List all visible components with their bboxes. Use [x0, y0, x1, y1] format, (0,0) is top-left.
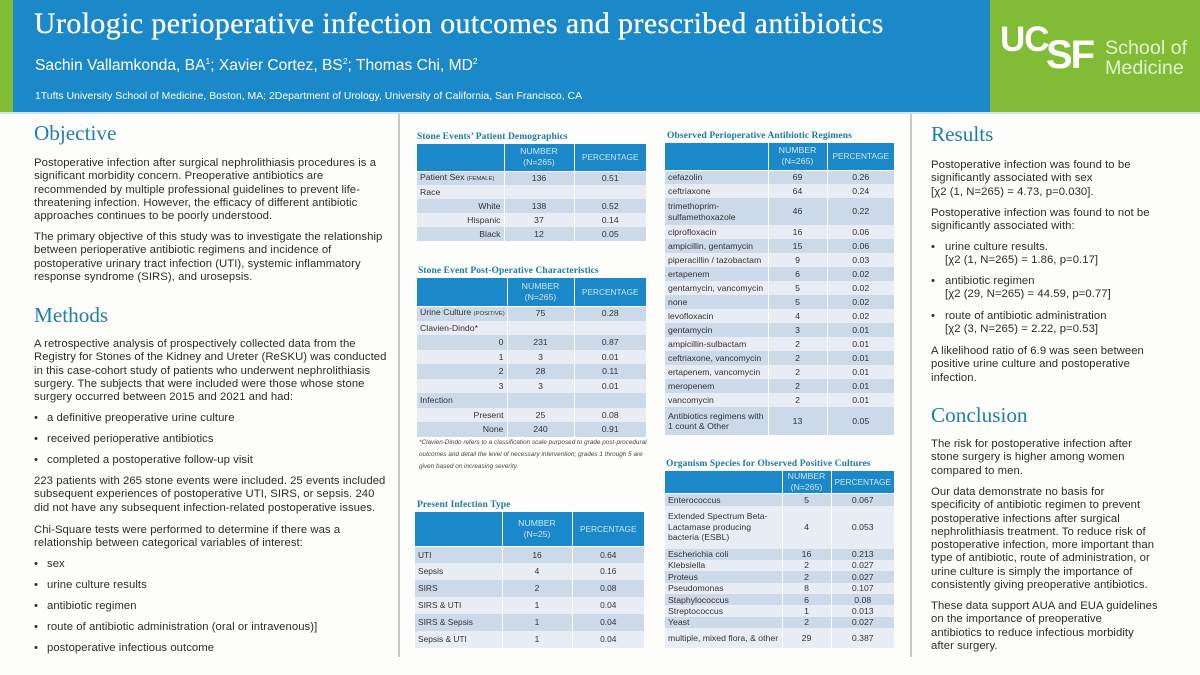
table: organism species: PERCENTAGE [834, 477, 891, 487]
list: non-associated variables: [χ2 (1, N=265) = 1.86, p=0.17] [945, 254, 1098, 266]
table: antibiotic regimens: 15 [793, 241, 802, 251]
list: inclusion criteria [34, 412, 253, 466]
text: sex association: [χ2 (1, N=265) = 4.73, p=0.030]. [931, 186, 1094, 198]
table: post-operative characteristics: 3 [538, 380, 543, 390]
table: present infection type: 2 [535, 583, 539, 593]
table: post-operative characteristics: 0.01 [602, 380, 619, 390]
table: present infection type: UTI [418, 550, 432, 560]
table: antibiotic regimens: piperacillin / tazobactam [668, 255, 761, 265]
table: organism species: 0.08 [854, 594, 871, 604]
table: post-operative characteristics: 0.11 [602, 366, 618, 376]
table: organism species: Klebsiella [668, 560, 705, 570]
table: antibiotic regimens: meropenem [668, 381, 714, 391]
table: organism species: 2 [804, 560, 809, 570]
column divider right [910, 114, 912, 657]
table: organism species: 2 [804, 572, 809, 582]
table: antibiotic regimens: 0.02 [852, 297, 869, 307]
list: non-associated variables: [χ2 (3, N=265) = 2.22, p=0.53] [945, 323, 1098, 335]
table: antibiotic regimens: 0.01 [852, 325, 869, 335]
table: antibiotic regimens: 6 [795, 269, 800, 279]
table: antibiotic regimens: 64 [793, 186, 802, 196]
panel: results and conclusion [931, 122, 1158, 652]
text: patient counts: subsequent experiences of postoperative UTI, SIRS, or sepsis. 240 [34, 488, 374, 500]
table: organism species: Streptococcus [668, 606, 723, 616]
table: organism species: 0.213 [852, 549, 874, 559]
text: methods paragraph: surgery. The subjects that were included were those whose stone [34, 378, 365, 390]
authors: Sachin Vallamkonda, BA1; Xavier Cortez, BS2; Thomas Chi, MD2 [35, 56, 478, 74]
table: present infection type: 0.04 [600, 617, 616, 627]
text: no association intro: Postoperative infection was found to not be [931, 207, 1150, 219]
table: post-operative characteristics: 3 [499, 380, 504, 390]
left green stripe [0, 0, 13, 112]
footnote: Clavien-Dindo [419, 439, 647, 470]
table: present infection type: 1 [535, 634, 539, 644]
table: organism species: multiple, mixed flora, & other [668, 633, 778, 643]
footnote: Clavien-Dindo: outcomes and detail the level of necessary intervention; grades 1 through 5 are [419, 451, 643, 458]
table: organism species: bacteria (ESBL) [668, 532, 729, 542]
table: antibiotic regimens: 0.03 [852, 255, 869, 265]
text: chi-square intro: relationship between categorical variables of interest: [34, 537, 303, 549]
table: antibiotic regimens: Antibiotics regimens with [668, 410, 764, 420]
list: non-associated variables: antibiotic regimen [945, 275, 1035, 287]
table: patient demographics: 37 [534, 215, 544, 225]
text: conclusion 2: urine culture is simply the importance of [931, 566, 1132, 578]
text: likelihood ratio: infection. [931, 372, 977, 384]
table: organism species: 1 [804, 606, 809, 616]
text: methods paragraph: surgery occurred between 2015 and 2021 and had: [34, 391, 293, 403]
text: objective paragraph 1: approaches continues to be poorly understood. [34, 210, 272, 222]
affiliations: 1Tufts University School of Medicine, Boston, MA; 2Department of Urology, University of California, San Francisco, CA [35, 91, 582, 102]
table: antibiotic regimens: 0.05 [852, 416, 869, 426]
table: post-operative characteristics [417, 278, 646, 437]
table: organism species: 0.387 [852, 633, 874, 643]
table: post-operative characteristics: None [483, 424, 504, 434]
table: organism species: Proteus [668, 572, 698, 582]
table: present infection type: 0.04 [600, 600, 616, 610]
table: present infection type: NUMBER [518, 518, 556, 528]
table: organism species: (N=265) [791, 482, 822, 492]
text: conclusion 2: nephrolithiasis treatment. To reduce risk of [931, 526, 1146, 538]
table: antibiotic regimens: 5 [795, 283, 800, 293]
table: present infection type: 1 [535, 600, 539, 610]
table: antibiotic regimens: 0.01 [852, 367, 869, 377]
table: patient demographics: 136 [532, 173, 546, 183]
table: antibiotic regimens: ceftriaxone, vancomycin [668, 353, 761, 363]
table: present infection type: 1 [535, 617, 539, 627]
text: no association intro [931, 207, 1150, 232]
text: methods paragraph: in this case-cohort study of patients who underwent nephrolithiasis [34, 365, 370, 377]
list: inclusion criteria: a definitive preoperative urine culture [47, 412, 235, 424]
text: conclusion 2: consistently giving preoperative antibiotics. [931, 579, 1148, 591]
green logo panel [990, 0, 1200, 112]
table: patient demographics: 0.52 [602, 201, 619, 211]
table: post-operative characteristics: Clavien-Dindo* [420, 322, 478, 332]
table: post-operative characteristics: (N=265) [525, 292, 556, 302]
table: organism species: 5 [804, 494, 809, 504]
table: antibiotic regimens: 0.22 [852, 206, 869, 216]
logo: School of Medicine [1105, 37, 1188, 79]
table: antibiotic regimens: gentamycin, vancomycin [668, 283, 763, 293]
table: antibiotic regimens: 0.24 [852, 186, 869, 196]
table: antibiotic regimens: sulfamethoxazole [668, 212, 736, 222]
blue title background [13, 0, 990, 112]
logo: UCSF wordmark: UC [1000, 20, 1049, 59]
text: conclusion 3: antibiotics to reduce infectious morbidity [931, 627, 1134, 639]
text: patient counts [34, 475, 385, 514]
table: post-operative characteristics: 3 [538, 352, 543, 362]
text: objective paragraph 2: between perioperative antibiotic regimens and incidence of [34, 244, 331, 256]
table: antibiotic regimens: 5 [795, 297, 800, 307]
table: antibiotic regimens: gentamycin [668, 325, 712, 335]
table: antibiotic regimens: 16 [793, 227, 802, 237]
table: patient demographics: PERCENTAGE [582, 152, 639, 162]
footnote: Clavien-Dindo: given based on increasing severity. [419, 463, 518, 470]
table: organism species: Pseudomonas [668, 583, 724, 593]
table: antibiotic regimens: NUMBER [779, 145, 816, 155]
table: present infection type: 0.08 [600, 583, 616, 593]
table: antibiotic regimens: ceftriaxone [668, 186, 710, 196]
table: antibiotic regimens: 2 [795, 381, 800, 391]
table: antibiotic regimens: 2 [795, 367, 800, 377]
heading: present infection table: Present Infection Type [417, 500, 510, 510]
text: methods paragraph: Registry for Stones of the Kidney and Ureter (ReSKU) was conducted [34, 351, 386, 363]
text: sex association: Postoperative infection was found to be [931, 159, 1131, 171]
table: present infection type: (N=25) [524, 529, 550, 539]
text: objective paragraph 2: postoperative urinary tract infection (UTI), systemic inflammatory [34, 258, 361, 270]
heading: organism species table: Organism Species for Observed Positive Cultures [666, 458, 871, 468]
panel: objective and methods: • [34, 600, 38, 612]
table: post-operative characteristics: 75 [536, 308, 545, 318]
table: post-operative characteristics: 231 [533, 337, 548, 347]
heading: demographics table: Stone Events’ Patient Demographics [417, 132, 568, 142]
panel: results and conclusion: • [931, 275, 935, 287]
text: objective paragraph 2: response syndrome (SIRS), and urosepsis. [34, 271, 252, 283]
table: patient demographics: 0.05 [602, 229, 619, 239]
table: antibiotic regimens: PERCENTAGE [832, 151, 889, 161]
text: patient counts: 223 patients with 265 stone events were included. 25 events included [34, 475, 385, 487]
text: conclusion 2: specificity of antibiotic regimen to prevent [931, 499, 1140, 511]
list: inclusion criteria: received perioperative antibiotics [47, 433, 214, 445]
table: antibiotic regimens: 2 [795, 339, 800, 349]
table: post-operative characteristics: 25 [536, 410, 545, 420]
text: objective paragraph 1: Postoperative infection after surgical nephrolithiasis procedures is a [34, 157, 376, 169]
table: organism species: 0.107 [852, 583, 874, 593]
title: Urologic perioperative infection outcomes and prescribed antibiotics [34, 7, 884, 40]
table: post-operative characteristics: PERCENTAGE [582, 286, 639, 296]
table: antibiotic regimens: 3 [795, 325, 800, 335]
table: organism species: Staphylococcus [668, 594, 729, 604]
table: antibiotic regimens: 1 count & Other [668, 421, 729, 431]
table: antibiotic regimens: 0.02 [852, 269, 869, 279]
table: present infection type: PERCENTAGE [580, 524, 637, 534]
logo: UCSF wordmark: SF [1046, 33, 1093, 77]
table: organism species: 6 [804, 594, 809, 604]
panel: results and conclusion: • [931, 310, 935, 322]
table: antibiotic regimens: 2 [795, 395, 800, 405]
table: antibiotic regimens: 0.01 [852, 339, 869, 349]
table: organism species: Yeast [668, 617, 689, 627]
table: antibiotic regimens [665, 143, 894, 435]
table: antibiotic regimens: ampicillin, gentamycin [668, 241, 753, 251]
table: present infection type [415, 512, 644, 648]
table: antibiotic regimens: 0.01 [852, 381, 869, 391]
list: variables [34, 558, 317, 654]
heading: results: Results [931, 122, 993, 146]
table: post-operative characteristics: Infection [420, 395, 453, 405]
list: non-associated variables: [χ2 (29, N=265) = 44.59, p=0.77] [945, 288, 1111, 300]
table: organism species: 0.027 [852, 560, 874, 570]
list: variables: sex [47, 558, 65, 570]
table: organism species: 0.027 [852, 572, 874, 582]
table: organism species: 0.013 [852, 606, 874, 616]
text: objective paragraph 1: threatening infection. However, the efficacy of different antibiotic [34, 197, 357, 209]
panel: objective and methods: • [34, 454, 38, 466]
table: organism species: 4 [804, 522, 809, 532]
text: likelihood ratio: A likelihood ratio of 6.9 was seen between [931, 345, 1144, 357]
table: post-operative characteristics: 1 [499, 352, 504, 362]
table: post-operative characteristics: 240 [533, 424, 548, 434]
table: organism species: 29 [802, 633, 811, 643]
table: antibiotic regimens: 4 [795, 311, 800, 321]
logo: UCSF wordmark [1000, 20, 1094, 77]
table: post-operative characteristics: 28 [536, 366, 545, 376]
table: organism species: 8 [804, 583, 809, 593]
table: organism species: 0.067 [852, 494, 874, 504]
panel: objective and methods: • [34, 412, 38, 424]
table: antibiotic regimens: 0.02 [852, 311, 869, 321]
text: conclusion 1: compared to men. [931, 465, 1023, 477]
table: post-operative characteristics: 0.28 [602, 308, 619, 318]
table: post-operative characteristics: Present [474, 410, 504, 420]
logo: School of Medicine: School of [1105, 37, 1187, 59]
table: organism species: Enterococcus [668, 494, 721, 504]
text: methods paragraph: A retrospective analysis of prospectively collected data from the [34, 338, 356, 350]
table: antibiotic regimens: ampicillin-sulbactam [668, 339, 746, 349]
text: conclusion 3: after surgery. [931, 640, 998, 652]
table: post-operative characteristics: 2 [499, 366, 504, 376]
text: methods paragraph [34, 338, 386, 403]
panel: objective and methods: • [34, 642, 38, 654]
table: patient demographics: NUMBER [520, 146, 558, 156]
table: antibiotic regimens: cefazolin [668, 172, 702, 182]
table: patient demographics: Black [479, 229, 500, 239]
text: conclusion 3: These data support AUA and EUA guidelines [931, 600, 1158, 612]
footnote: Clavien-Dindo: *Clavien-Dindo refers to a classification scale purposed to grade post-procedural [419, 439, 647, 446]
table: patient demographics: White [478, 201, 500, 211]
table: organism species: Lactamase producing [668, 522, 751, 532]
text: no association intro: significantly associated with: [931, 220, 1075, 232]
table: antibiotic regimens: 0.06 [852, 227, 869, 237]
text: conclusion 1: stone surgery is higher among women [931, 451, 1125, 463]
text: conclusion 1 [931, 438, 1132, 477]
table: antibiotic regimens: 2 [795, 353, 800, 363]
table: antibiotic regimens: ertapenem [668, 269, 710, 279]
panel: objective and methods: • [34, 558, 38, 570]
table: present infection type: 4 [535, 566, 539, 576]
table: antibiotic regimens: 0.01 [852, 353, 869, 363]
text: chi-square intro [34, 524, 340, 549]
text: sex association: significantly associated with sex [931, 172, 1092, 184]
table: post-operative characteristics: 0 [499, 337, 504, 347]
table: post-operative characteristics: 0.08 [602, 410, 619, 420]
table: present infection type: 16 [532, 550, 542, 560]
heading: antibiotic regimens table: Observed Perioperative Antibiotic Regimens [667, 130, 852, 140]
table: organism species: Extended Spectrum Beta- [668, 511, 767, 521]
table: patient demographics: (N=265) [523, 157, 555, 167]
list: variables: route of antibiotic administration (oral or intravenous)] [47, 621, 317, 633]
text: conclusion 2: type of antibiotic, route of administration, or [931, 552, 1150, 564]
table: antibiotic regimens: 0.01 [852, 395, 869, 405]
table: organism species: 2 [804, 617, 809, 627]
table: patient demographics [417, 144, 646, 241]
table: present infection type: 0.16 [600, 566, 616, 576]
header bottom edge [0, 112, 1200, 114]
table: post-operative characteristics: 0.91 [602, 424, 619, 434]
table: patient demographics: Patient Sex (FEMALE) [420, 172, 494, 182]
column divider left [398, 114, 400, 657]
text: objective paragraph 2: The primary objective of this study was to investigate the relationship [34, 231, 382, 243]
table: antibiotic regimens: ciprofloxacin [668, 227, 716, 237]
text: patient counts: did not have any subsequent infection-related postoperative issues. [34, 502, 375, 514]
text: likelihood ratio [931, 345, 1144, 384]
list: variables: postoperative infectious outcome [47, 642, 214, 654]
logo: School of Medicine: Medicine [1105, 57, 1184, 79]
heading: methods: Methods [34, 303, 108, 327]
table: post-operative characteristics: 0.01 [602, 352, 619, 362]
table: patient demographics: 0.14 [602, 215, 619, 225]
table: organism species [665, 471, 894, 648]
table: antibiotic regimens: 0.26 [852, 172, 869, 182]
table: present infection type: SIRS & Sepsis [418, 617, 473, 627]
table: organism species: 0.027 [852, 617, 874, 627]
table: antibiotic regimens: 9 [795, 255, 800, 265]
table: antibiotic regimens: 0.02 [852, 283, 869, 293]
table: antibiotic regimens: levofloxacin [668, 311, 713, 321]
table: antibiotic regimens: vancomycin [668, 395, 714, 405]
text: conclusion 1: The risk for postoperative infection after [931, 438, 1132, 450]
table: present infection type: SIRS & UTI [418, 600, 461, 610]
text: conclusion 3: on the importance of preoperative [931, 613, 1102, 625]
text: likelihood ratio: positive urine culture and postoperative [931, 358, 1130, 370]
list: variables: antibiotic regimen [47, 600, 137, 612]
table: post-operative characteristics: 0.87 [602, 337, 619, 347]
list: non-associated variables [931, 241, 1111, 335]
table: organism species: Escherichia coli [668, 549, 728, 559]
panel: objective and methods: • [34, 621, 38, 633]
table: antibiotic regimens: 46 [793, 206, 802, 216]
heading: objective: Objective [34, 121, 116, 145]
table: patient demographics: 138 [532, 201, 546, 211]
table: present infection type: 0.64 [600, 550, 616, 560]
header banner [0, 0, 1200, 114]
text: conclusion 2: postoperative infections after surgical [931, 513, 1120, 525]
table: antibiotic regimens: (N=265) [782, 156, 813, 166]
text: chi-square intro: Chi-Square tests were performed to determine if there was a [34, 524, 340, 536]
table: patient demographics: 0.51 [602, 173, 619, 183]
panel: objective and methods: • [34, 579, 38, 591]
text: conclusion 2: Our data demonstrate no basis for [931, 486, 1104, 498]
table: antibiotic regimens: none [668, 297, 687, 307]
table: antibiotic regimens: 0.06 [852, 241, 869, 251]
panel: results and conclusion: • [931, 241, 935, 253]
table: present infection type: SIRS [418, 583, 438, 593]
table: patient demographics: 12 [534, 229, 544, 239]
list: inclusion criteria: completed a postoperative follow-up visit [47, 454, 253, 466]
table: antibiotic regimens: 13 [793, 416, 802, 426]
table: present infection type: 0.04 [600, 634, 616, 644]
table: post-operative characteristics: NUMBER [522, 281, 559, 291]
table: patient demographics: Hispanic [467, 215, 500, 225]
text: conclusion 3 [931, 600, 1158, 652]
heading: post-operative table: Stone Event Post-Operative Characteristics [418, 266, 599, 276]
text: objective paragraph 1: recommended by multiple professional guidelines to prevent life- [34, 184, 360, 196]
panel: objective and methods [34, 121, 386, 654]
heading: conclusion: Conclusion [931, 403, 1028, 427]
list: variables: urine culture results [47, 579, 147, 591]
table: antibiotic regimens: trimethoprim- [668, 201, 719, 211]
text: objective paragraph 1: significant morbidity concern. Preoperative antibiotics are [34, 170, 323, 182]
text: conclusion 2: postoperative infection, more important than [931, 539, 1154, 551]
panel: objective and methods: • [34, 433, 38, 445]
table: present infection type: Sepsis & UTI [418, 634, 467, 644]
table: post-operative characteristics: Urine Culture (POSITIVE) [420, 307, 505, 317]
table: antibiotic regimens: 69 [793, 172, 802, 182]
text: objective paragraph 2 [34, 231, 382, 283]
text: conclusion 2 [931, 486, 1154, 591]
table: organism species: 0.053 [852, 522, 874, 532]
table: organism species: 16 [802, 549, 811, 559]
text: sex association [931, 159, 1131, 198]
table: organism species: NUMBER [788, 471, 825, 481]
table: antibiotic regimens: ertapenem, vancomycin [668, 367, 760, 377]
table: present infection type: Sepsis [418, 566, 443, 576]
table: patient demographics: Race [420, 187, 440, 197]
list: non-associated variables: route of antibiotic administration [945, 310, 1107, 322]
text: objective paragraph 1 [34, 157, 376, 222]
list: non-associated variables: urine culture results. [945, 241, 1048, 253]
